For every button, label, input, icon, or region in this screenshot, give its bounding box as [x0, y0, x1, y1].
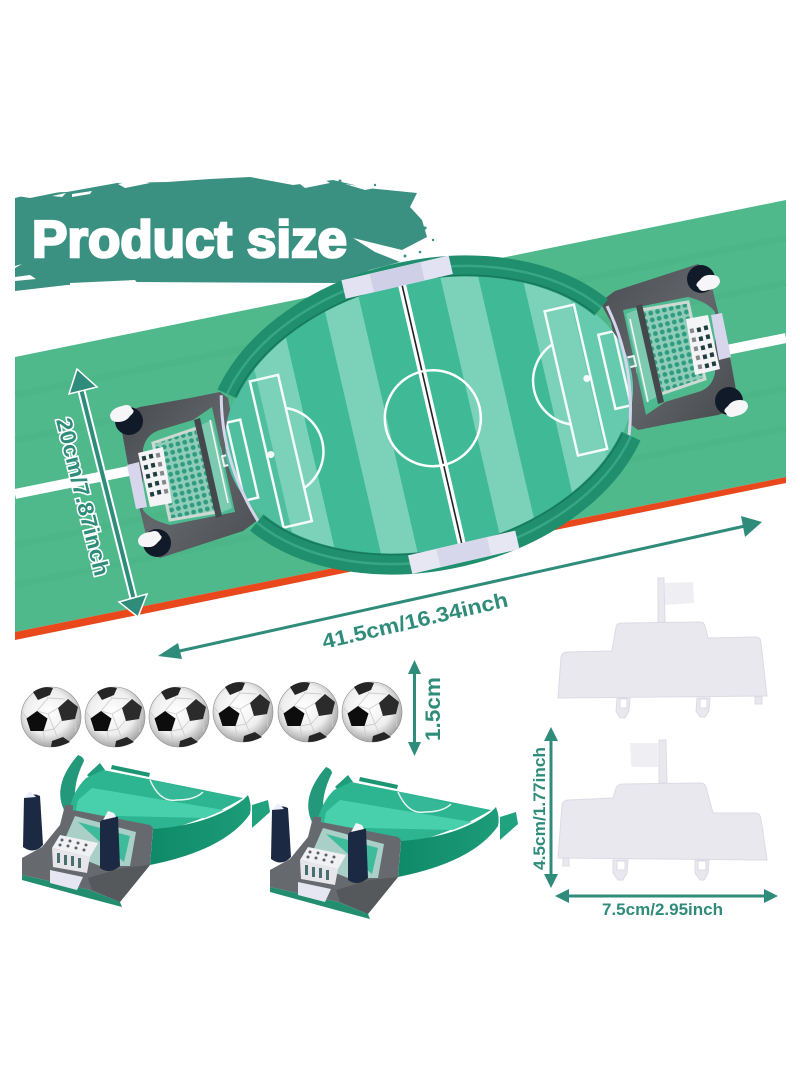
bottom white plate	[558, 740, 767, 880]
lavender goal edges	[215, 305, 643, 525]
pitch strip background	[15, 200, 786, 640]
arrow: plate width	[555, 889, 778, 903]
arrow: plate height	[544, 727, 558, 888]
left goal	[110, 392, 258, 558]
label: 7.5cm/2.95inch: 7.5cm/2.95inch	[602, 901, 723, 919]
top white plate	[558, 578, 767, 718]
arrow: ball size	[408, 660, 421, 756]
label: 41.5cm/16.34inch: 41.5cm/16.34inch	[320, 589, 510, 654]
arrow: board length	[158, 516, 762, 659]
label: 20cm/7.87inch: 20cm/7.87inch	[51, 415, 115, 578]
half board right	[270, 767, 518, 919]
top connector	[341, 255, 453, 299]
game board	[218, 255, 640, 575]
brush banner	[15, 177, 434, 291]
playing field	[225, 276, 633, 554]
title: Product size	[32, 211, 347, 269]
right goal	[600, 264, 748, 430]
arrow: board height	[69, 369, 147, 617]
label: 1.5cm: 1.5cm	[422, 677, 445, 741]
soccer balls	[21, 682, 402, 747]
label: 4.5cm/1.77inch: 4.5cm/1.77inch	[530, 747, 549, 870]
outer ring	[209, 231, 649, 599]
product size infographic	[14, 177, 787, 919]
half board left	[22, 755, 270, 907]
bottom connector	[408, 531, 519, 574]
